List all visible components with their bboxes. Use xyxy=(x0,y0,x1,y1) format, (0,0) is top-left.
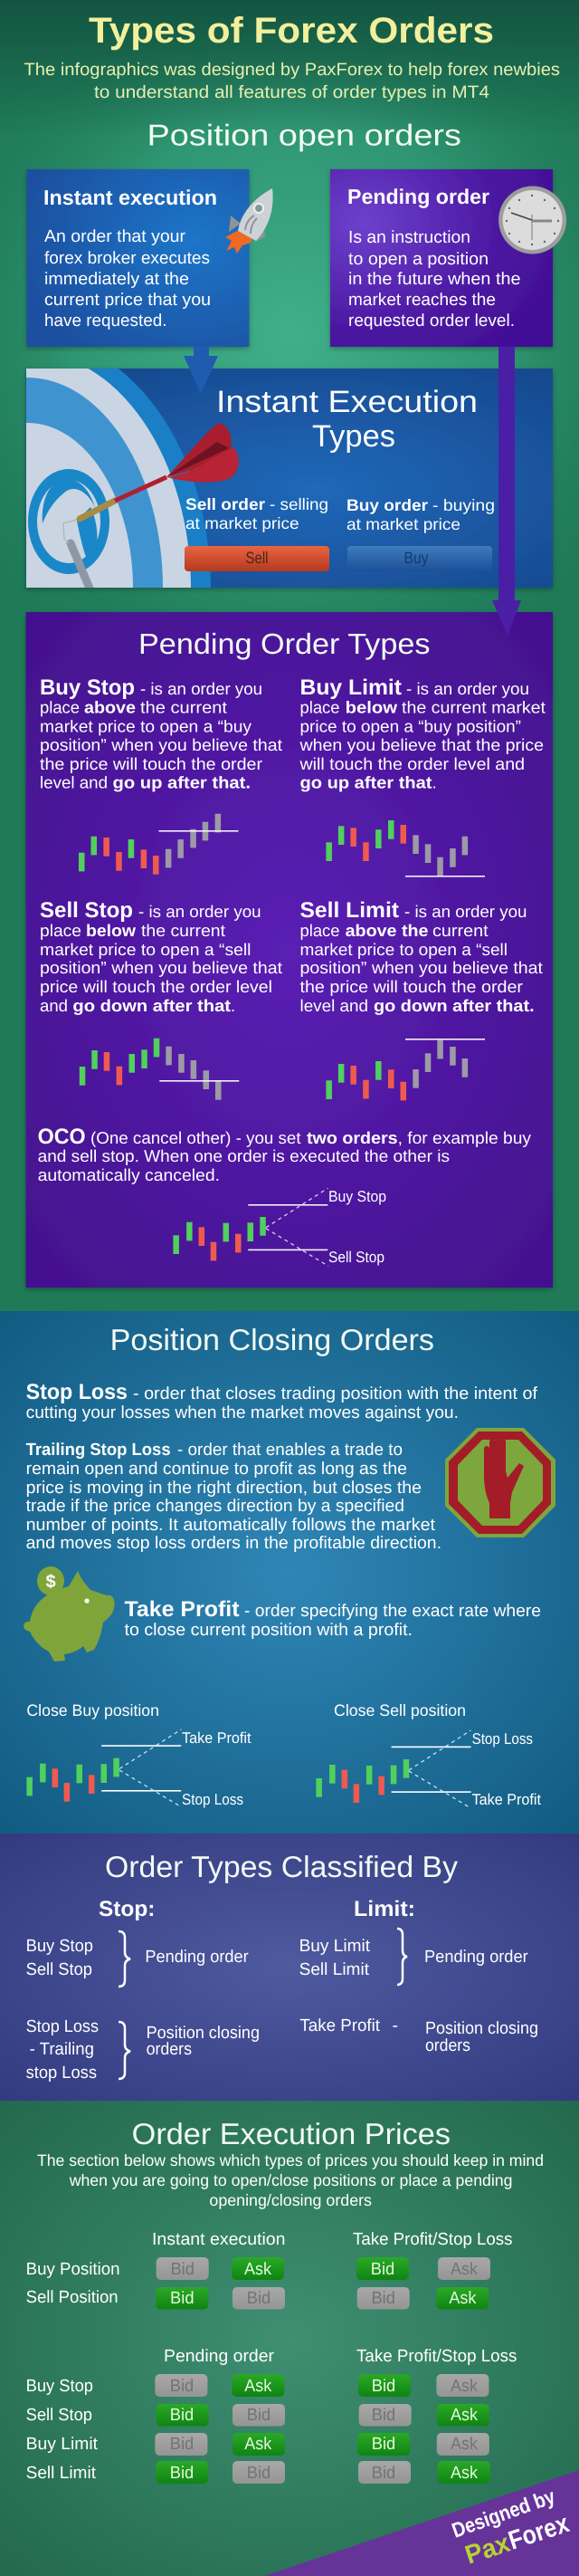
table: instant execution prices: Buy Position xyxy=(26,2260,120,2279)
text: oco: OCO xyxy=(38,1125,86,1149)
column: limit: - xyxy=(393,2016,398,2035)
column: stop: Stop Loss xyxy=(26,2017,99,2036)
chart: close buy position: Close Buy position xyxy=(26,1701,159,1719)
background: green execution prices section xyxy=(0,2101,579,2576)
text: sell order: at market price xyxy=(185,514,299,532)
text: oco: (One cancel other) - you set xyxy=(90,1128,301,1147)
table: pending order prices: Bid xyxy=(372,2435,395,2454)
text: sell limit: position” when you believe that xyxy=(300,958,543,977)
chart: close sell position xyxy=(316,1701,541,1808)
column: stop: stop Loss xyxy=(26,2064,97,2083)
text: oco: , for example buy xyxy=(398,1128,532,1147)
text: take profit: - order specifying the exact rate where xyxy=(244,1602,541,1621)
text: buy limit: will touch the order level and xyxy=(299,754,525,773)
heading: order types classified by: Order Types Classified By xyxy=(105,1850,459,1883)
text: trailing stop loss xyxy=(26,1441,441,1553)
chart: close buy position: Take Profit xyxy=(182,1729,252,1747)
panel: instant execution: current price that you xyxy=(44,291,211,310)
table: pending order prices: Bid xyxy=(372,2406,395,2425)
table: pending order prices: Bid xyxy=(170,2435,194,2454)
table: instant execution prices: Ask xyxy=(451,2260,478,2279)
panel: pending order: Pending order xyxy=(347,185,489,208)
icon: dart xyxy=(63,424,239,543)
column: stop xyxy=(26,1897,260,2083)
text: oco: two orders xyxy=(307,1128,398,1147)
table: instant execution prices: Bid xyxy=(247,2289,271,2308)
column: stop: Buy Stop xyxy=(26,1937,93,1956)
icon: clock xyxy=(498,187,566,254)
heading: position closing orders: Position Closing Orders xyxy=(110,1323,434,1356)
corner banner: designed by paxforex xyxy=(264,2470,579,2576)
text: execution prices intro xyxy=(37,2151,544,2209)
column: stop: Position closing xyxy=(147,2024,260,2043)
text: buy stop: above xyxy=(84,698,136,717)
text: sell limit: place xyxy=(300,921,340,940)
table: pending order prices: Sell Stop xyxy=(26,2406,92,2425)
table: pending order prices: Bid xyxy=(372,2377,395,2396)
text: buy stop: go up after that. xyxy=(112,773,251,791)
text: oco xyxy=(38,1125,532,1184)
chart: sell stop candles xyxy=(80,1039,239,1100)
button: buy xyxy=(347,546,492,571)
text: stop loss: Stop Loss xyxy=(26,1380,128,1404)
text: buy stop: the current xyxy=(140,698,227,717)
text: sell stop: market price to open a “sell xyxy=(40,940,252,959)
table: pending order prices: Bid xyxy=(247,2464,271,2483)
column: limit: Sell Limit xyxy=(299,1960,370,1979)
text: buy order: Buy order xyxy=(346,496,428,514)
text: sell limit xyxy=(300,898,543,1015)
table: instant execution prices: Sell Position xyxy=(26,2288,119,2307)
button: sell xyxy=(185,546,329,571)
text: sell stop: below xyxy=(86,921,137,940)
heading: position open orders: Position open orders xyxy=(147,119,461,152)
text: buy stop: the price will touch the order xyxy=(40,754,262,773)
table: instant execution prices: Bid xyxy=(371,2260,394,2279)
panel: pending order: in the future when the xyxy=(348,270,521,289)
chart: close sell position: Stop Loss xyxy=(472,1730,533,1748)
text: buy order xyxy=(346,496,495,533)
text: stop loss: - order that closes trading position with the intent of xyxy=(133,1384,538,1403)
text: buy limit: Buy Limit xyxy=(300,675,402,700)
chart: close buy position xyxy=(26,1701,252,1808)
text: buy limit: go up after that xyxy=(300,773,432,791)
table: instant execution prices: Bid xyxy=(371,2289,395,2308)
heading: pending order types: Pending Order Types xyxy=(138,627,431,660)
panel: instant execution: forex broker executes xyxy=(44,249,210,268)
table: instant execution prices: Instant execution xyxy=(152,2230,286,2249)
text: execution prices intro: when you are going to open/close positions or place a pending xyxy=(69,2171,513,2189)
icon: piggy bank with coin xyxy=(24,1566,115,1661)
table: pending order prices: Take Profit/Stop Loss xyxy=(356,2347,517,2366)
text: sell limit: current xyxy=(432,921,489,940)
table: pending order prices xyxy=(26,2347,517,2484)
text: trailing stop loss: remain open and continue to profit as long as the xyxy=(26,1460,407,1479)
text: execution prices intro: opening/closing orders xyxy=(209,2191,372,2209)
chart: oco candles with buy stop and sell stop xyxy=(173,1188,386,1266)
panel: instant execution: An order that your xyxy=(44,227,186,246)
table: pending order prices: Buy Limit xyxy=(26,2435,99,2454)
text: buy limit: . xyxy=(432,773,437,791)
text: buy limit: below xyxy=(346,698,398,717)
text: buy limit: the current market xyxy=(402,698,546,717)
text: buy stop: market price to open a “buy xyxy=(40,716,252,735)
text: take profit: to close current position with a profit. xyxy=(125,1621,413,1640)
text: trailing stop loss: and moves stop loss orders in the profitable direction. xyxy=(26,1534,441,1553)
column: stop: Pending order xyxy=(145,1948,249,1967)
text: buy order: - buying xyxy=(432,496,495,514)
text: take profit: Take Profit xyxy=(125,1597,240,1622)
text: buy stop: - is an order you xyxy=(140,679,262,698)
chart: close sell position: Close Sell position xyxy=(334,1701,466,1719)
text: sell limit: the price will touch the order xyxy=(300,977,523,996)
table: pending order prices: Ask xyxy=(244,2377,272,2396)
text: sell limit: - is an order you xyxy=(404,902,527,921)
text: sell order: - selling xyxy=(270,495,328,513)
table: pending order prices: Ask xyxy=(451,2377,478,2396)
icon: target xyxy=(26,369,211,588)
text: buy limit xyxy=(299,675,546,791)
table: pending order prices: Bid xyxy=(170,2464,194,2483)
heading: instant execution types: Types xyxy=(312,419,395,454)
table: pending order prices: Pending order xyxy=(164,2347,275,2366)
heading: instant execution types: Instant Execution xyxy=(216,385,478,419)
column: limit: Pending order xyxy=(424,1948,528,1967)
table: instant execution prices: Ask xyxy=(449,2289,477,2308)
arrow: pending order down xyxy=(492,347,521,636)
text: buy stop xyxy=(40,675,282,791)
background: green position orders section xyxy=(0,0,579,1311)
table: pending order prices: Ask xyxy=(451,2435,478,2454)
text: sell stop: . xyxy=(231,996,235,1015)
panel: pending order: to open a position xyxy=(348,250,489,269)
panel: pending order: Is an instruction xyxy=(348,228,470,247)
background: blue closing orders section xyxy=(0,1311,579,1834)
table: pending order prices: Ask xyxy=(451,2464,478,2483)
heading: instant execution types xyxy=(216,385,478,454)
panel: instant execution: Instant execution xyxy=(43,186,217,209)
text: buy limit: - is an order you xyxy=(406,679,529,698)
text: buy limit: place xyxy=(300,698,340,717)
chart: oco candles with buy stop and sell stop: Sell Stop xyxy=(328,1249,384,1266)
subtitle: to understand all features of order types in MT4 xyxy=(94,82,489,102)
text: sell limit: level and xyxy=(300,996,368,1015)
panel: instant execution: immediately at the xyxy=(44,270,189,289)
text: sell limit: above the xyxy=(346,921,429,940)
subtitle xyxy=(24,60,560,102)
column: stop: Sell Stop xyxy=(26,1960,92,1979)
text: sell limit: Sell Limit xyxy=(300,898,399,923)
table: instant execution prices: Take Profit/Stop Loss xyxy=(353,2230,512,2249)
chart: close buy position: Stop Loss xyxy=(182,1791,243,1808)
panel: instant execution types xyxy=(24,368,555,592)
text: sell stop: Sell Stop xyxy=(40,898,133,923)
column: stop: orders xyxy=(147,2040,192,2059)
text: sell order xyxy=(185,495,328,532)
table: pending order prices: Bid xyxy=(247,2406,271,2425)
column: limit: Take Profit xyxy=(299,2016,381,2035)
text: sell stop: position” when you believe that xyxy=(40,958,282,977)
button: sell: Sell xyxy=(246,549,268,567)
text: sell order: Sell order xyxy=(185,495,265,513)
corner banner: designed by paxforex: Pax xyxy=(461,2529,514,2571)
panel: pending order types xyxy=(26,612,553,1288)
text: sell stop: - is an order you xyxy=(138,902,261,921)
table: instant execution prices: Ask xyxy=(244,2260,271,2279)
corner banner: designed by paxforex: Designed by xyxy=(449,2484,558,2542)
panel: instant execution xyxy=(26,169,249,347)
text: oco: automatically canceled. xyxy=(38,1165,220,1184)
background: indigo classification section xyxy=(0,1834,579,2101)
text: sell stop: go down after that xyxy=(72,996,231,1015)
column: limit: orders xyxy=(425,2036,470,2055)
table: pending order prices: Bid xyxy=(170,2406,194,2425)
text: buy stop: level and xyxy=(40,773,108,791)
column: limit: Buy Limit xyxy=(299,1937,371,1956)
table: pending order prices: Bid xyxy=(372,2464,395,2483)
text: stop loss xyxy=(26,1380,538,1422)
panel: instant execution: have requested. xyxy=(44,311,166,330)
table: instant execution prices xyxy=(26,2230,513,2309)
text: buy order: at market price xyxy=(346,515,460,533)
text: execution prices intro: The section below shows which types of prices you should keep in mind xyxy=(37,2151,544,2169)
table: pending order prices: Ask xyxy=(451,2406,478,2425)
text: trailing stop loss: Trailing Stop Loss xyxy=(26,1441,171,1460)
column: stop: Stop: xyxy=(99,1897,155,1921)
table: pending order prices: Sell Limit xyxy=(26,2464,97,2483)
text: stop loss: cutting your losses when the market moves against you. xyxy=(26,1403,459,1422)
heading: order execution prices: Order Execution Prices xyxy=(132,2117,451,2150)
panel: pending order xyxy=(330,169,553,347)
arrow: instant execution down xyxy=(184,347,218,394)
text: trailing stop loss: - order that enables a trade to xyxy=(177,1441,403,1460)
text: trailing stop loss: number of points. It automatically follows the market xyxy=(26,1516,436,1535)
table: pending order prices: Bid xyxy=(170,2377,194,2396)
column: stop: - Trailing xyxy=(30,2040,94,2059)
column: limit xyxy=(299,1897,538,2055)
column: limit: Position closing xyxy=(425,2019,538,2038)
chart: buy limit candles xyxy=(326,820,485,877)
chart: close sell position: Take Profit xyxy=(472,1791,541,1808)
text: buy stop: place xyxy=(40,698,80,717)
text: buy stop: Buy Stop xyxy=(40,675,135,700)
column: limit: Limit: xyxy=(354,1897,415,1921)
chart: sell limit candles xyxy=(326,1039,485,1100)
text: buy limit: price to open a “buy position” xyxy=(300,716,521,735)
panel: pending order: requested order level. xyxy=(348,311,515,330)
text: buy stop: position” when you believe that xyxy=(40,735,282,754)
text: trailing stop loss: trade if the price changes direction by a specified xyxy=(26,1497,404,1516)
text: sell stop xyxy=(40,898,282,1015)
button: buy: Buy xyxy=(403,549,429,567)
text: sell stop: and xyxy=(40,996,68,1015)
text: sell stop: place xyxy=(40,921,81,940)
title: Types of Forex Orders xyxy=(89,11,494,51)
icon: rocket xyxy=(225,188,273,254)
table: pending order prices: Ask xyxy=(244,2435,272,2454)
text: sell stop: price will touch the order level xyxy=(40,977,272,996)
text: trailing stop loss: price is moving in the right direction, but closes the xyxy=(26,1479,422,1498)
chart: oco candles with buy stop and sell stop: Buy Stop xyxy=(328,1188,386,1205)
panel: pending order: market reaches the xyxy=(348,291,496,310)
table: pending order prices: Buy Stop xyxy=(26,2377,93,2396)
table: instant execution prices: Bid xyxy=(170,2260,195,2279)
text: sell limit: go down after that. xyxy=(374,996,535,1015)
icon: stop sign with hand xyxy=(445,1428,555,1537)
icon: piggy bank with coin: $ xyxy=(45,1572,56,1592)
table: instant execution prices: Bid xyxy=(170,2289,195,2308)
text: oco: and sell stop. When one order is executed the other is xyxy=(38,1146,450,1165)
text: buy limit: when you believe that the price xyxy=(299,735,544,754)
chart: buy stop candles xyxy=(79,814,239,875)
subtitle: The infographics was designed by PaxForex to help forex newbies xyxy=(24,60,560,80)
text: sell stop: the current xyxy=(141,921,225,940)
text: take profit xyxy=(125,1597,541,1640)
text: sell limit: market price to open a “sell xyxy=(300,940,508,959)
